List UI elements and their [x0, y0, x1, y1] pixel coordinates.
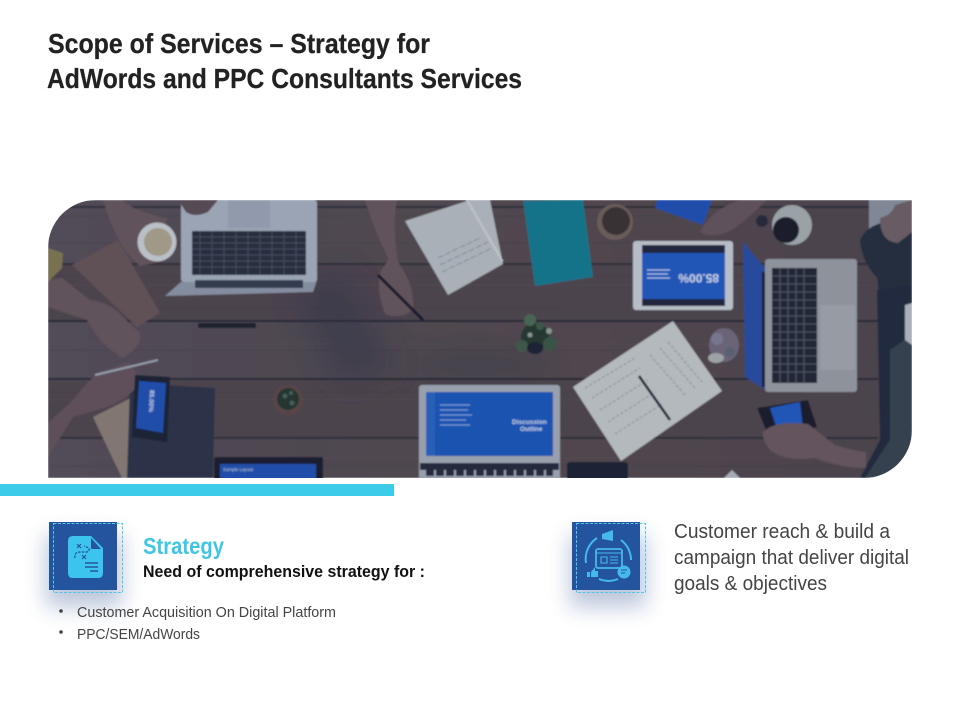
centre tablet	[633, 241, 733, 310]
table wood planks	[48, 200, 912, 478]
left phone: 85.00%	[147, 390, 155, 412]
bottom tablet: Sample Layout	[223, 467, 254, 472]
left phone	[132, 375, 170, 442]
bottom tablet	[214, 457, 323, 481]
right phone with hand	[757, 400, 866, 468]
bullet list	[59, 605, 336, 643]
spiral notebook	[405, 200, 503, 295]
accent bar	[0, 484, 394, 496]
text block: customer reach: Customer reach & build a	[674, 521, 891, 543]
text block: customer reach	[674, 521, 909, 595]
bottom centre laptop: Discussion	[512, 419, 547, 426]
left arm and hand	[48, 278, 140, 358]
dark coffee cup	[756, 205, 812, 245]
title	[47, 28, 522, 94]
text block: customer reach: goals & objectives	[674, 573, 827, 595]
green plant	[516, 314, 557, 354]
subheading: Need of comprehensive strategy for :	[143, 562, 425, 581]
top-left laptop	[165, 200, 317, 296]
bottom centre laptop	[419, 385, 560, 485]
panel: team meeting photo	[48, 200, 912, 485]
text block: customer reach: campaign that deliver digital	[674, 547, 909, 569]
top phone with hand	[655, 200, 767, 235]
heading: strategy: Strategy	[143, 533, 224, 559]
right laptop	[743, 242, 857, 392]
pen on table	[198, 323, 256, 328]
bottom phone	[567, 462, 628, 480]
right person	[860, 200, 912, 478]
lower-left hand with pen	[48, 360, 158, 457]
yellow sleeve	[48, 248, 63, 282]
bullet list: PPC/SEM/AdWords	[77, 627, 200, 643]
hand with cup	[103, 200, 176, 266]
bullet list: Customer Acquisition On Digital Platform	[77, 605, 336, 621]
brown notebook	[72, 240, 160, 327]
title: Scope of Services – Strategy for	[48, 28, 430, 59]
icon: customer reach cycle	[570, 522, 646, 607]
centre tablet: 85.00%	[678, 271, 719, 285]
coffee mug ring	[597, 204, 633, 240]
beige paper and dark folder	[93, 383, 215, 478]
paper corner	[724, 470, 740, 478]
bottom centre laptop: Outline	[520, 426, 543, 433]
icon: strategy document	[46, 522, 122, 607]
teal book	[523, 200, 593, 286]
succulent pot	[708, 328, 739, 363]
top centre arm and pen	[365, 200, 423, 320]
title: AdWords and PPC Consultants Services	[47, 63, 522, 94]
small potted plant	[273, 385, 303, 415]
open notebook with pen	[573, 321, 722, 461]
